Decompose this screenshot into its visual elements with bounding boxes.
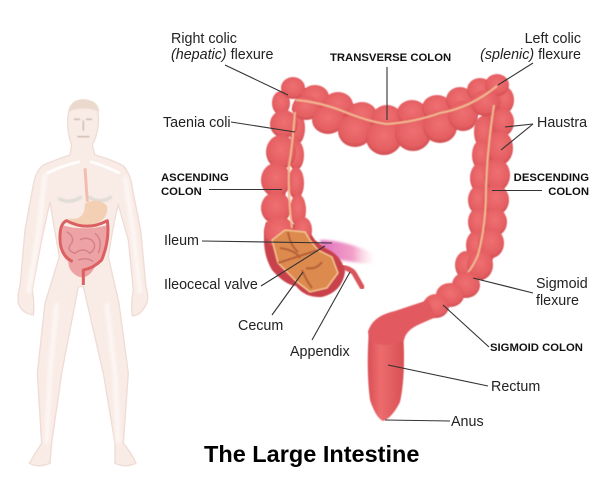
label: ascending colon: COLON (161, 186, 202, 198)
pink terminal ileum (320, 240, 375, 264)
transverse colon haustra (281, 74, 509, 155)
descending colon haustra (455, 87, 514, 280)
label: cecum: Cecum (238, 318, 283, 334)
body shading (28, 173, 140, 443)
appendix (340, 267, 362, 287)
label: haustra: Haustra (537, 115, 587, 131)
cecum interior (272, 230, 338, 292)
ascending colon tube (282, 105, 285, 232)
descending colon tube (470, 100, 498, 275)
sigmoid colon (423, 272, 480, 318)
label: ileum: Ileum (164, 233, 199, 249)
small colon (60, 221, 108, 285)
rectum (368, 330, 404, 421)
ascending colon haustra (261, 91, 312, 248)
label: sigmoid colon: SIGMOID COLON (490, 342, 583, 354)
label: anus: Anus (451, 414, 484, 430)
sigmoid to rectum tube (368, 300, 436, 345)
label: appendix: Appendix (290, 344, 350, 360)
label: right colic flexure: Right colic (171, 31, 237, 47)
cecum outer wall (264, 222, 345, 297)
illustration: large intestine (261, 74, 514, 421)
label: ileocecal valve: Ileocecal valve (164, 277, 258, 293)
taenia coli bands (289, 86, 497, 290)
label: ascending colon: ASCENDING (161, 172, 229, 184)
label: left colic flexure: Left colic (525, 31, 581, 47)
label: sigmoid flexure: Sigmoid (536, 276, 588, 292)
label: descending colon: DESCENDING (514, 172, 589, 184)
body silhouette (18, 100, 148, 466)
label: descending colon: COLON (548, 186, 589, 198)
face and hair (47, 99, 120, 201)
stomach and esophagus (68, 168, 107, 225)
label: taenia coli: Taenia coli (163, 115, 231, 131)
label: rectum: Rectum (491, 379, 540, 395)
transverse colon tube (296, 92, 495, 128)
label: sigmoid flexure: flexure (536, 293, 579, 309)
label: right colic flexure: (hepatic) flexure (171, 47, 274, 63)
label: left colic flexure: (splenic) flexure (480, 47, 581, 63)
leader lines (202, 63, 542, 421)
illustration: human body with digestive organs (18, 99, 148, 466)
title: The Large Intestine (204, 441, 419, 467)
intestine folds (67, 232, 100, 262)
small intestine (60, 225, 108, 277)
label: transverse colon: TRANSVERSE COLON (330, 52, 451, 64)
